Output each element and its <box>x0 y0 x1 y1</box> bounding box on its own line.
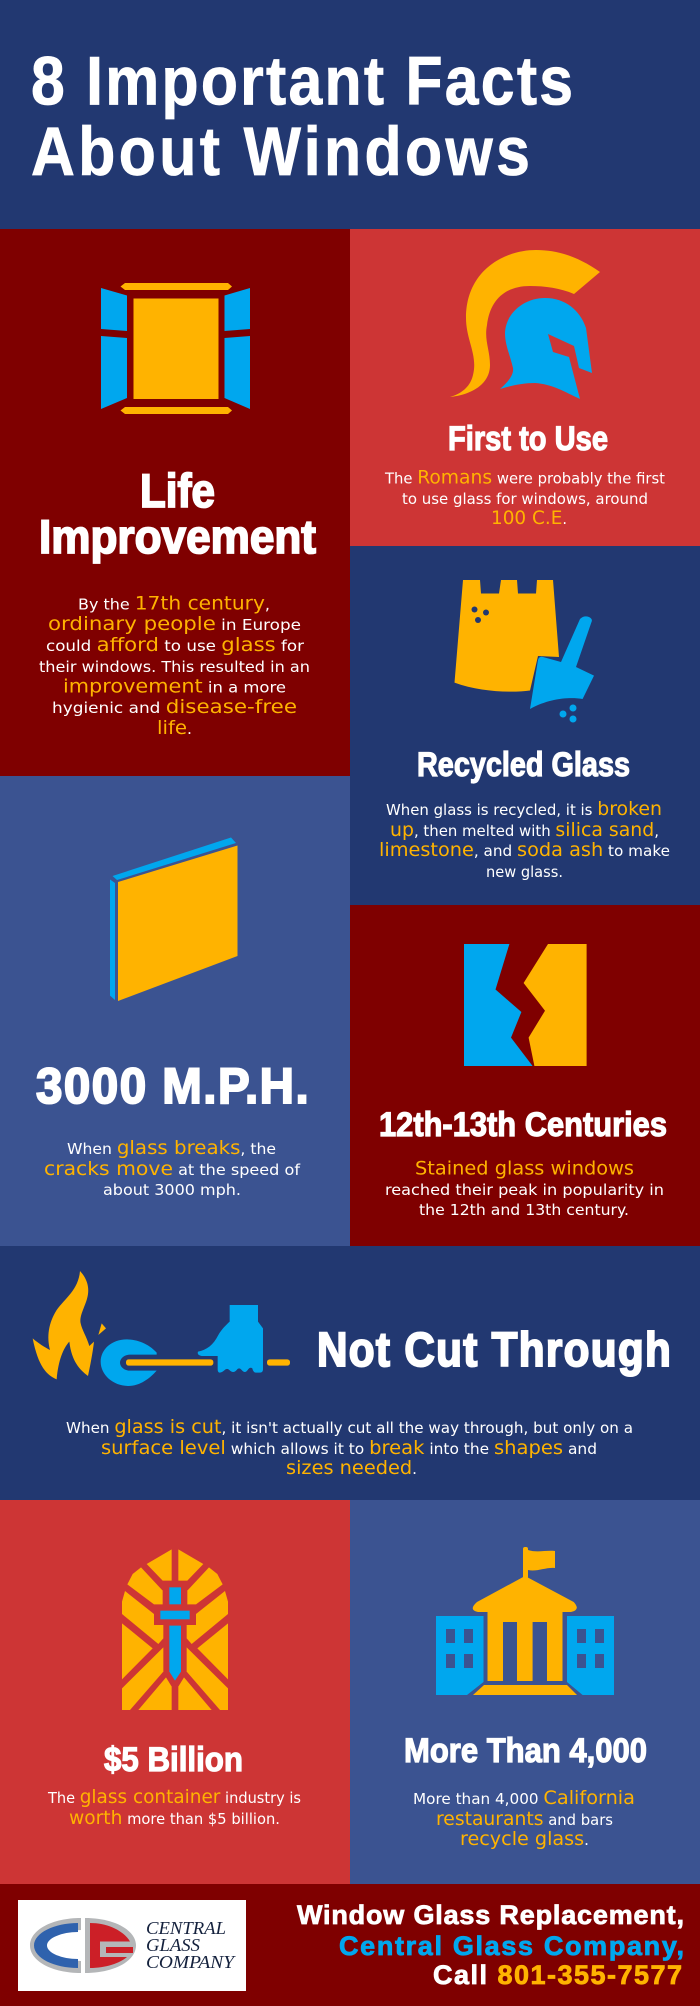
text: recycled glass: limestone, and soda ash to make <box>379 839 670 861</box>
call to action: Call 801-355-7577 <box>433 1960 682 1990</box>
text: first to use: to use glass for windows, around <box>402 490 648 508</box>
panel: 3000 mph <box>0 776 350 1246</box>
text: not cut through: sizes needed. <box>286 1457 417 1479</box>
heading: life improvement <box>39 464 316 563</box>
text: life improvement: could afford to use glass for <box>46 634 305 656</box>
heading: recycled glass: Recycled Glass <box>417 746 630 784</box>
text: life improvement: By the 17th century , <box>78 592 270 614</box>
logo wordmark <box>146 1918 236 1972</box>
logo: central glass company <box>18 1900 246 1991</box>
text: 3000 mph: When glass breaks , the <box>67 1137 276 1159</box>
panel: more than 4000 <box>350 1500 700 1884</box>
text: first to use: The Romans were probably the first <box>384 466 665 488</box>
text: 12th-13th centuries: reached their peak in popularity in <box>385 1181 664 1199</box>
panel: first to use <box>350 229 700 546</box>
icon: sand castle and shovel <box>454 580 594 722</box>
text: life improvement: ordinary people in Europe <box>48 613 301 635</box>
text: 3000 mph <box>44 1137 301 1199</box>
call to action: Window Glass Replacement, <box>297 1900 684 1930</box>
title: About Windows <box>31 112 530 190</box>
text: first to use: 100 C.E. <box>491 507 567 529</box>
logo wordmark: CENTRAL <box>146 1918 226 1938</box>
title <box>31 42 573 190</box>
text: first to use <box>384 466 665 529</box>
text: 12th-13th centuries: Stained glass windows <box>415 1158 634 1180</box>
text: recycled glass: When glass is recycled, it is broken <box>386 798 662 820</box>
call to action: Central Glass Company, <box>339 1931 684 1961</box>
text: not cut through: surface level which allows it to break into the shapes and <box>101 1437 597 1459</box>
text: 3000 mph: about 3000 mph. <box>103 1181 241 1199</box>
text: 12th-13th centuries <box>385 1158 664 1219</box>
text: more than 4000: More than 4,000 California <box>413 1787 635 1809</box>
icon: cracked glass <box>464 944 587 1066</box>
logo emblem <box>30 1918 136 1973</box>
icon: stained glass window <box>122 1549 228 1710</box>
icon: glass cutter and flame <box>33 1271 290 1386</box>
text: life improvement: hygienic and disease-free <box>52 696 297 718</box>
text: life improvement <box>39 592 310 739</box>
heading: life improvement: Life <box>140 464 215 517</box>
heading: 3000 mph: 3000 M.P.H. <box>36 1059 309 1114</box>
heading: 12th-13th centuries: 12th-13th Centuries <box>379 1106 667 1144</box>
heading: not cut through: Not Cut Through <box>317 1322 671 1377</box>
heading: 5 billion: $5 Billion <box>104 1741 243 1779</box>
text: 5 billion: worth more than $5 billion. <box>69 1807 280 1829</box>
heading: first to use: First to Use <box>448 420 608 458</box>
title: 8 Important Facts <box>31 42 573 119</box>
panel: 12th-13th centuries <box>350 905 700 1246</box>
text: more than 4000 <box>413 1787 635 1850</box>
text: 3000 mph: cracks move at the speed of <box>44 1158 301 1180</box>
icon: glass pane <box>110 838 238 1001</box>
icon: building with flag <box>436 1547 614 1695</box>
panel: not cut through <box>0 1246 700 1500</box>
text: life improvement: life. <box>157 717 192 739</box>
text: not cut through: When glass is cut, it isn't actually cut all the way through, but only on a <box>66 1416 633 1438</box>
heading: life improvement: Improvement <box>39 510 316 563</box>
text: 12th-13th centuries: the 12th and 13th century. <box>419 1201 629 1219</box>
icon: open window <box>101 283 250 414</box>
call to action <box>297 1900 684 1990</box>
panel: recycled glass <box>350 546 700 905</box>
text: life improvement: improvement in a more <box>63 676 286 698</box>
text: 5 billion <box>47 1786 301 1829</box>
heading: more than 4000: More Than 4,000 <box>404 1732 647 1770</box>
icon: roman helmet <box>450 250 600 399</box>
footer panel <box>0 1884 700 2006</box>
text: not cut through <box>66 1416 633 1479</box>
logo wordmark: COMPANY <box>146 1952 236 1972</box>
logo wordmark: GLASS <box>146 1935 200 1955</box>
header panel <box>0 0 700 229</box>
text: 5 billion: The glass container industry is <box>47 1786 301 1808</box>
panel: 5 billion <box>0 1500 350 1884</box>
panel: life improvement <box>0 229 350 776</box>
text: more than 4000: restaurants and bars <box>436 1808 613 1830</box>
text: more than 4000: recycle glass. <box>460 1828 589 1850</box>
text: recycled glass: up, then melted with silica sand, <box>390 819 659 841</box>
text: life improvement: their windows. This resulted in an <box>39 658 310 676</box>
text: recycled glass <box>379 798 670 881</box>
text: recycled glass: new glass. <box>486 863 563 881</box>
